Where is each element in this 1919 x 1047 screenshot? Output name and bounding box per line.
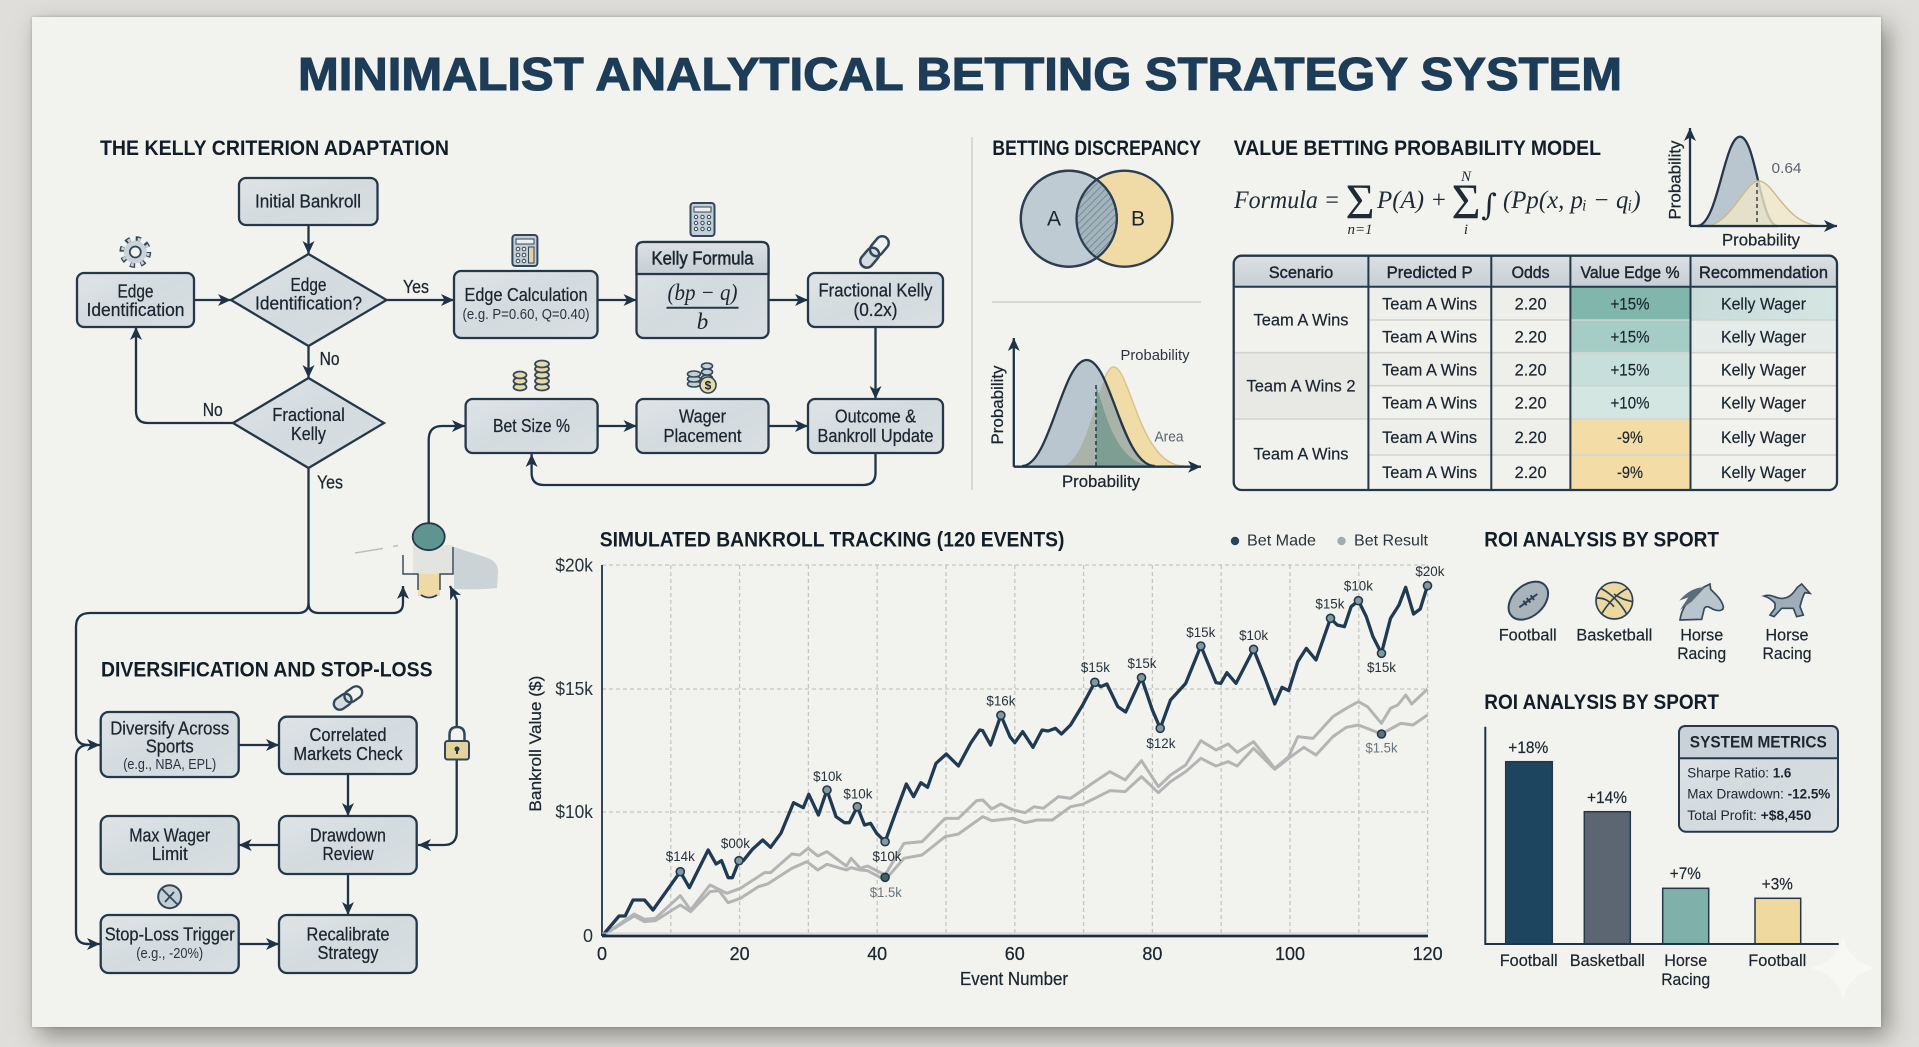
icon: gear bbox=[122, 239, 148, 265]
box: outcome and bankroll update: Bankroll Update bbox=[818, 426, 934, 446]
table body: 2.20 bbox=[1515, 328, 1547, 346]
heading: roi analysis top: ROI ANALYSIS BY SPORT bbox=[1484, 529, 1719, 552]
chart point labels: $10k bbox=[843, 786, 873, 802]
box: edge calculation bbox=[454, 271, 598, 338]
formula: Formula = bbox=[1233, 187, 1340, 214]
icon: football bbox=[1501, 574, 1555, 627]
chart point labels: $1.5k bbox=[1366, 740, 1398, 756]
table body: +15% bbox=[1610, 360, 1650, 380]
chart point labels: $10k bbox=[813, 769, 842, 784]
box: max wager limit: Max Wager bbox=[129, 826, 210, 846]
box: outcome and bankroll update: Outcome & bbox=[835, 407, 916, 427]
box: bet size bbox=[466, 399, 598, 453]
box: edge identification: Identification bbox=[86, 300, 184, 320]
heading: diversification: DIVERSIFICATION AND STOP-LOSS bbox=[101, 659, 432, 682]
box: correlated markets check bbox=[279, 717, 417, 774]
chart point labels: $20k bbox=[1415, 564, 1445, 579]
table fills bbox=[1234, 256, 1837, 490]
heading: betting discrepancy: BETTING DISCREPANCY bbox=[992, 137, 1201, 160]
line chart: bankroll series bbox=[602, 586, 1427, 936]
formula: (Pp(x, pᵢ − qᵢ) bbox=[1503, 187, 1641, 214]
sport labels: Basketball bbox=[1576, 626, 1652, 644]
box: bet size: Bet Size % bbox=[493, 416, 570, 436]
box: recalibrate strategy: Strategy bbox=[318, 943, 378, 963]
bar labels: Horse bbox=[1664, 951, 1707, 970]
box: kelly formula: Kelly Formula bbox=[652, 248, 754, 268]
callout: system metrics: SYSTEM METRICS bbox=[1690, 733, 1827, 751]
box: diversify across sports: (e.g., NBA, EPL) bbox=[123, 757, 216, 773]
bar axes bbox=[1485, 727, 1839, 944]
grid lines bbox=[602, 565, 1428, 936]
box: wager placement: Wager bbox=[679, 407, 726, 427]
bar values: +7% bbox=[1670, 864, 1701, 883]
formula: i bbox=[1464, 222, 1468, 238]
legend bbox=[1231, 532, 1429, 550]
table body: Team A Wins 2 bbox=[1246, 376, 1356, 396]
table body: Team A Wins bbox=[1254, 310, 1348, 330]
label: no (down): No bbox=[320, 349, 340, 369]
chart: small probability curves bbox=[1666, 128, 1837, 250]
heading: kelly criterion: THE KELLY CRITERION ADAPTATION bbox=[100, 137, 449, 160]
bar labels: Racing bbox=[1661, 970, 1710, 989]
x axis labels: 60 bbox=[1005, 944, 1025, 964]
table header: Odds bbox=[1512, 263, 1550, 282]
table body: 2.20 bbox=[1515, 294, 1547, 314]
formula: Σ bbox=[1451, 173, 1481, 229]
table header bbox=[1269, 263, 1828, 282]
y axis labels: Bankroll Value ($) bbox=[526, 676, 545, 812]
legend: Bet Result bbox=[1354, 532, 1429, 550]
box: fractional kelly: (0.2x) bbox=[854, 300, 898, 320]
y axis labels: $15k bbox=[555, 679, 594, 699]
legend: Bet Made bbox=[1247, 532, 1316, 550]
chart point labels: $00k bbox=[721, 836, 750, 851]
decision: edge identification: Edge bbox=[290, 275, 326, 295]
box: diversify across sports: Diversify Across bbox=[110, 718, 229, 738]
label: yes: Yes bbox=[403, 277, 429, 297]
chart point labels: $16k bbox=[986, 694, 1016, 708]
sport labels: Football bbox=[1499, 626, 1557, 644]
table body: +15% bbox=[1610, 328, 1650, 346]
chart point labels: $15k bbox=[1186, 625, 1216, 640]
box: edge calculation: (e.g. P=0.60, Q=0.40) bbox=[462, 307, 590, 323]
table body: Kelly Wager bbox=[1721, 360, 1806, 380]
title: MINIMALIST ANALYTICAL BETTING STRATEGY SYSTEM bbox=[298, 48, 1622, 100]
panel: simulated bankroll tracking bbox=[526, 529, 1445, 989]
y axis labels bbox=[526, 556, 594, 946]
box: stop-loss trigger: Stop-Loss Trigger bbox=[105, 924, 235, 944]
connector arrows bbox=[76, 225, 876, 944]
chart point labels: $15k bbox=[1367, 660, 1396, 675]
panel: sport icons bbox=[1484, 529, 1812, 663]
box: initial bankroll bbox=[239, 178, 378, 225]
table header: Predicted P bbox=[1387, 263, 1473, 282]
box: max wager limit bbox=[101, 816, 239, 874]
panel: diversification and stop-loss bbox=[101, 586, 469, 973]
connector arrows bbox=[239, 586, 457, 944]
box: wager placement bbox=[636, 399, 768, 453]
box: outcome and bankroll update bbox=[808, 399, 943, 453]
box: correlated markets check: Markets Check bbox=[294, 744, 403, 764]
chart point labels: $15k bbox=[1081, 660, 1110, 675]
icon: calculator bbox=[512, 235, 537, 266]
table: scenarios bbox=[1234, 256, 1837, 490]
callout: system metrics: Total Profit: +$8,450 bbox=[1687, 807, 1812, 823]
x axis labels: 20 bbox=[730, 944, 750, 964]
icon: coins with dollar: $ bbox=[705, 378, 712, 392]
box: edge calculation: Edge Calculation bbox=[464, 285, 588, 305]
table body bbox=[1246, 294, 1806, 482]
chart point labels: $10k bbox=[872, 849, 902, 864]
box: drawdown review bbox=[279, 816, 417, 874]
label: no (left): No bbox=[203, 400, 223, 420]
bar values: +3% bbox=[1762, 874, 1793, 894]
box: kelly formula bbox=[636, 242, 768, 338]
table body: Team A Wins bbox=[1382, 328, 1477, 346]
venn diagram: A bbox=[1047, 208, 1061, 230]
box: kelly formula: (bp − q) bbox=[668, 280, 738, 305]
chart point labels: $12k bbox=[1146, 736, 1176, 751]
chart: small probability curves: Probability bbox=[1722, 230, 1800, 250]
x axis labels: Event Number bbox=[960, 969, 1068, 989]
table body: Kelly Wager bbox=[1721, 428, 1806, 447]
icon: chain link 2 bbox=[331, 684, 365, 712]
box: correlated markets check: Correlated bbox=[310, 725, 386, 745]
box: stop-loss trigger: (e.g., -20%) bbox=[136, 946, 203, 962]
table header: Scenario bbox=[1269, 263, 1333, 282]
y axis labels: $10k bbox=[555, 802, 594, 822]
table body: Team A Wins bbox=[1382, 294, 1477, 314]
heading: roi analysis bottom: ROI ANALYSIS BY SPORT bbox=[1484, 691, 1719, 714]
table body: Team A Wins bbox=[1382, 463, 1477, 482]
x axis labels: 0 bbox=[597, 944, 607, 964]
chart point labels: $14k bbox=[666, 849, 695, 864]
callout: system metrics: Max Drawdown: -12.5% bbox=[1687, 786, 1831, 802]
box: initial bankroll: Initial Bankroll bbox=[255, 192, 361, 212]
table body: Kelly Wager bbox=[1721, 294, 1806, 314]
table body: +10% bbox=[1610, 394, 1650, 412]
axes bbox=[602, 565, 1428, 936]
formula: Σ bbox=[1345, 173, 1375, 229]
y axis labels: 0 bbox=[583, 926, 593, 946]
chart point labels: $10k bbox=[1239, 628, 1268, 643]
box: diversify across sports: Sports bbox=[146, 737, 194, 757]
chart: overlapping probability curves: Probability bbox=[1120, 348, 1190, 364]
x axis labels: 40 bbox=[867, 944, 887, 964]
table body: +15% bbox=[1610, 294, 1650, 314]
chart: overlapping probability curves: Probability bbox=[989, 365, 1007, 444]
decision: fractional kelly bbox=[233, 378, 384, 468]
box: wager placement: Placement bbox=[664, 426, 742, 446]
callout: system metrics bbox=[1679, 726, 1838, 832]
heading: value betting: VALUE BETTING PROBABILITY MODEL bbox=[1234, 137, 1601, 160]
panel: kelly criterion flowchart bbox=[76, 137, 943, 944]
sport labels: Racing bbox=[1677, 644, 1726, 663]
panel: betting discrepancy bbox=[972, 137, 1201, 491]
bar labels: Football bbox=[1500, 951, 1558, 970]
bar values: +18% bbox=[1508, 738, 1548, 757]
chart: small probability curves: 0.64 bbox=[1772, 161, 1802, 177]
x axis labels: 120 bbox=[1413, 944, 1443, 964]
chart point labels: $1.5k bbox=[870, 885, 902, 900]
box: fractional kelly bbox=[808, 273, 943, 327]
icon: running horse bbox=[1764, 584, 1810, 617]
table body: 2.20 bbox=[1515, 360, 1547, 380]
box: kelly formula: b bbox=[697, 309, 708, 334]
icon: chain link bbox=[858, 234, 891, 270]
panel: roi bar chart bbox=[1484, 691, 1839, 989]
chart point labels: $15k bbox=[1315, 596, 1345, 612]
venn diagram: B bbox=[1131, 208, 1145, 230]
table body: 2.20 bbox=[1515, 394, 1547, 412]
box: recalibrate strategy bbox=[279, 915, 417, 973]
box: drawdown review: Drawdown bbox=[310, 826, 386, 846]
table body: Kelly Wager bbox=[1721, 394, 1806, 412]
formula bbox=[1233, 169, 1641, 238]
table header: Value Edge % bbox=[1580, 263, 1680, 282]
x axis labels bbox=[597, 944, 1443, 989]
label: yes (down): Yes bbox=[317, 473, 343, 493]
decision: edge identification bbox=[231, 254, 386, 346]
x axis labels: 100 bbox=[1275, 944, 1305, 964]
chart point labels: $15k bbox=[1128, 656, 1157, 671]
sport labels bbox=[1499, 626, 1812, 663]
box: edge identification: Edge bbox=[118, 282, 154, 302]
chart: small probability curves: Probability bbox=[1666, 140, 1684, 220]
table body: Team A Wins bbox=[1382, 428, 1477, 447]
chart: overlapping probability curves bbox=[989, 338, 1201, 491]
icon: calculator 2 bbox=[690, 203, 714, 236]
bar values bbox=[1508, 738, 1793, 894]
box: edge identification bbox=[77, 273, 194, 327]
bar labels: Football bbox=[1748, 951, 1806, 970]
icon: padlock bbox=[445, 727, 469, 760]
panel: value betting probability model bbox=[1233, 128, 1837, 490]
chart markers bbox=[676, 582, 1432, 881]
table body: Team A Wins bbox=[1382, 360, 1477, 380]
x axis labels: 80 bbox=[1142, 944, 1162, 964]
table body: Team A Wins bbox=[1382, 394, 1477, 412]
table body: -9% bbox=[1617, 428, 1643, 447]
box: fractional kelly: Fractional Kelly bbox=[818, 281, 932, 301]
decision: edge identification: Identification? bbox=[255, 293, 362, 313]
sport labels: Horse bbox=[1766, 626, 1808, 644]
formula: ∫ bbox=[1481, 188, 1497, 223]
icon: basketball bbox=[1596, 582, 1633, 619]
formula: P(A) + bbox=[1376, 187, 1447, 214]
sport labels: Horse bbox=[1680, 626, 1723, 644]
sparkle watermark bbox=[1810, 935, 1876, 1001]
chart point labels bbox=[666, 564, 1445, 900]
decision: fractional kelly: Kelly bbox=[291, 424, 326, 444]
heading: bankroll tracking: SIMULATED BANKROLL TRACKING (120 EVENTS) bbox=[600, 529, 1064, 552]
chart point labels: $10k bbox=[1344, 578, 1373, 594]
bar labels bbox=[1500, 951, 1806, 989]
bar values: +14% bbox=[1587, 788, 1627, 807]
decision: fractional kelly: Fractional bbox=[272, 405, 345, 425]
chart: overlapping probability curves: Area bbox=[1154, 430, 1184, 446]
venn diagram bbox=[1021, 171, 1172, 267]
formula: N bbox=[1460, 169, 1472, 185]
box: stop-loss trigger bbox=[101, 915, 239, 973]
table body: 2.20 bbox=[1515, 463, 1547, 482]
icon: horse head bbox=[1679, 584, 1723, 620]
chart: overlapping probability curves: Probability bbox=[1062, 472, 1140, 491]
table header: Recommendation bbox=[1699, 263, 1828, 282]
icon: coins with dollar bbox=[688, 363, 716, 393]
box: drawdown review: Review bbox=[322, 844, 374, 864]
callout: system metrics: Sharpe Ratio: 1.6 bbox=[1687, 765, 1791, 781]
broken hub icon bbox=[355, 523, 498, 598]
table body: Team A Wins bbox=[1254, 444, 1348, 464]
icon: coin stacks bbox=[514, 360, 549, 390]
bars bbox=[1506, 762, 1801, 944]
table body: 2.20 bbox=[1515, 428, 1547, 447]
box: recalibrate strategy: Recalibrate bbox=[306, 924, 390, 944]
bar labels: Basketball bbox=[1570, 951, 1645, 970]
box: max wager limit: Limit bbox=[152, 844, 188, 864]
box: diversify across sports bbox=[101, 712, 239, 777]
sport labels: Racing bbox=[1762, 644, 1812, 663]
y axis labels: $20k bbox=[555, 556, 594, 576]
table body: Kelly Wager bbox=[1721, 328, 1806, 346]
icon: cancel sign bbox=[158, 885, 181, 908]
table body: -9% bbox=[1617, 463, 1643, 482]
formula: n=1 bbox=[1347, 222, 1373, 238]
table body: Kelly Wager bbox=[1721, 463, 1806, 482]
